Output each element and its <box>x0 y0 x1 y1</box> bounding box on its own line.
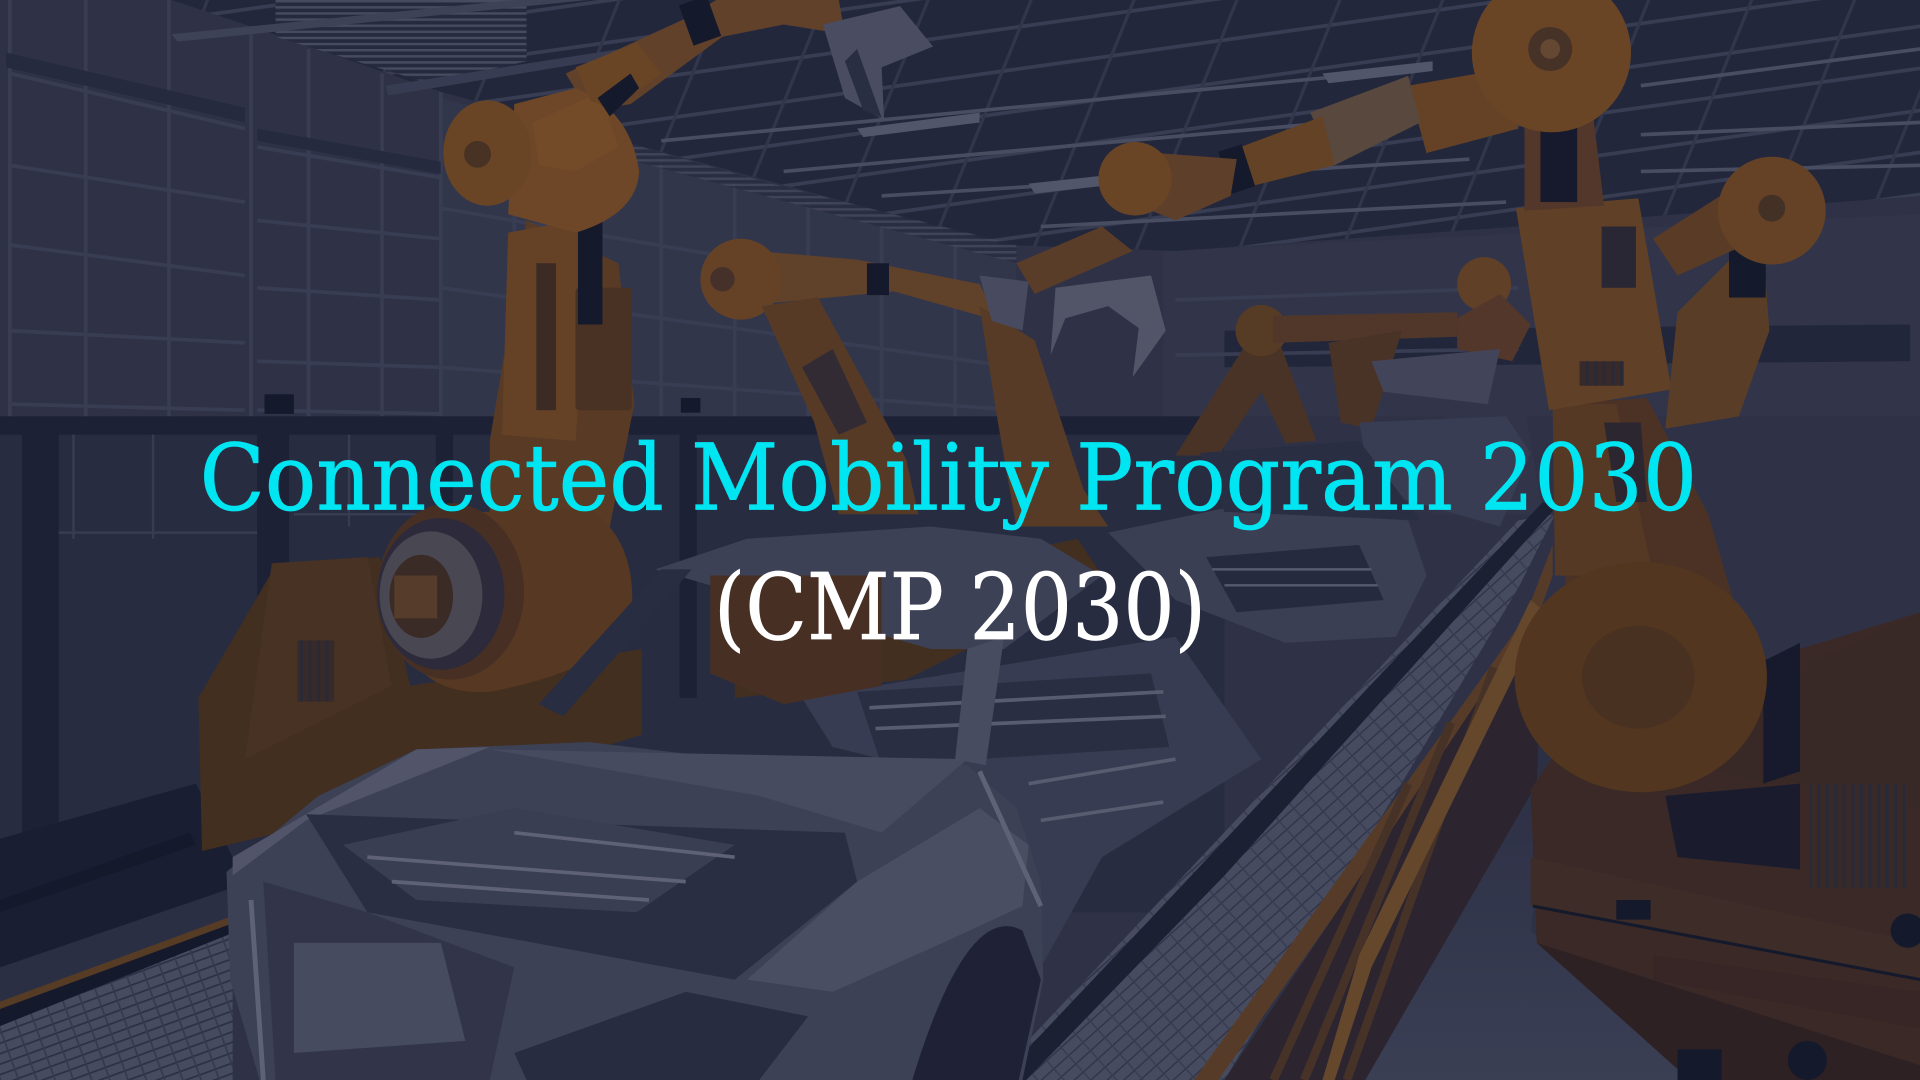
car body: middle <box>539 527 1261 967</box>
robot: right foreground <box>1098 0 1920 1080</box>
car body: rear <box>1108 416 1531 643</box>
background: lower wall, railing and posts <box>0 394 1224 1016</box>
robot: left foreground <box>198 43 661 851</box>
robot: right conveyor <box>998 502 1555 1080</box>
subtitle: (CMP 2030) <box>714 554 1206 661</box>
background: ceiling trusses <box>171 0 1920 263</box>
robot: middle arm <box>700 227 1166 698</box>
background: floor <box>1359 698 1690 1080</box>
title: Connected Mobility Program 2030 <box>200 424 1697 531</box>
robot: overhead arm <box>566 0 933 120</box>
car body: foreground <box>0 742 1043 1080</box>
robot: back line <box>1176 257 1543 514</box>
